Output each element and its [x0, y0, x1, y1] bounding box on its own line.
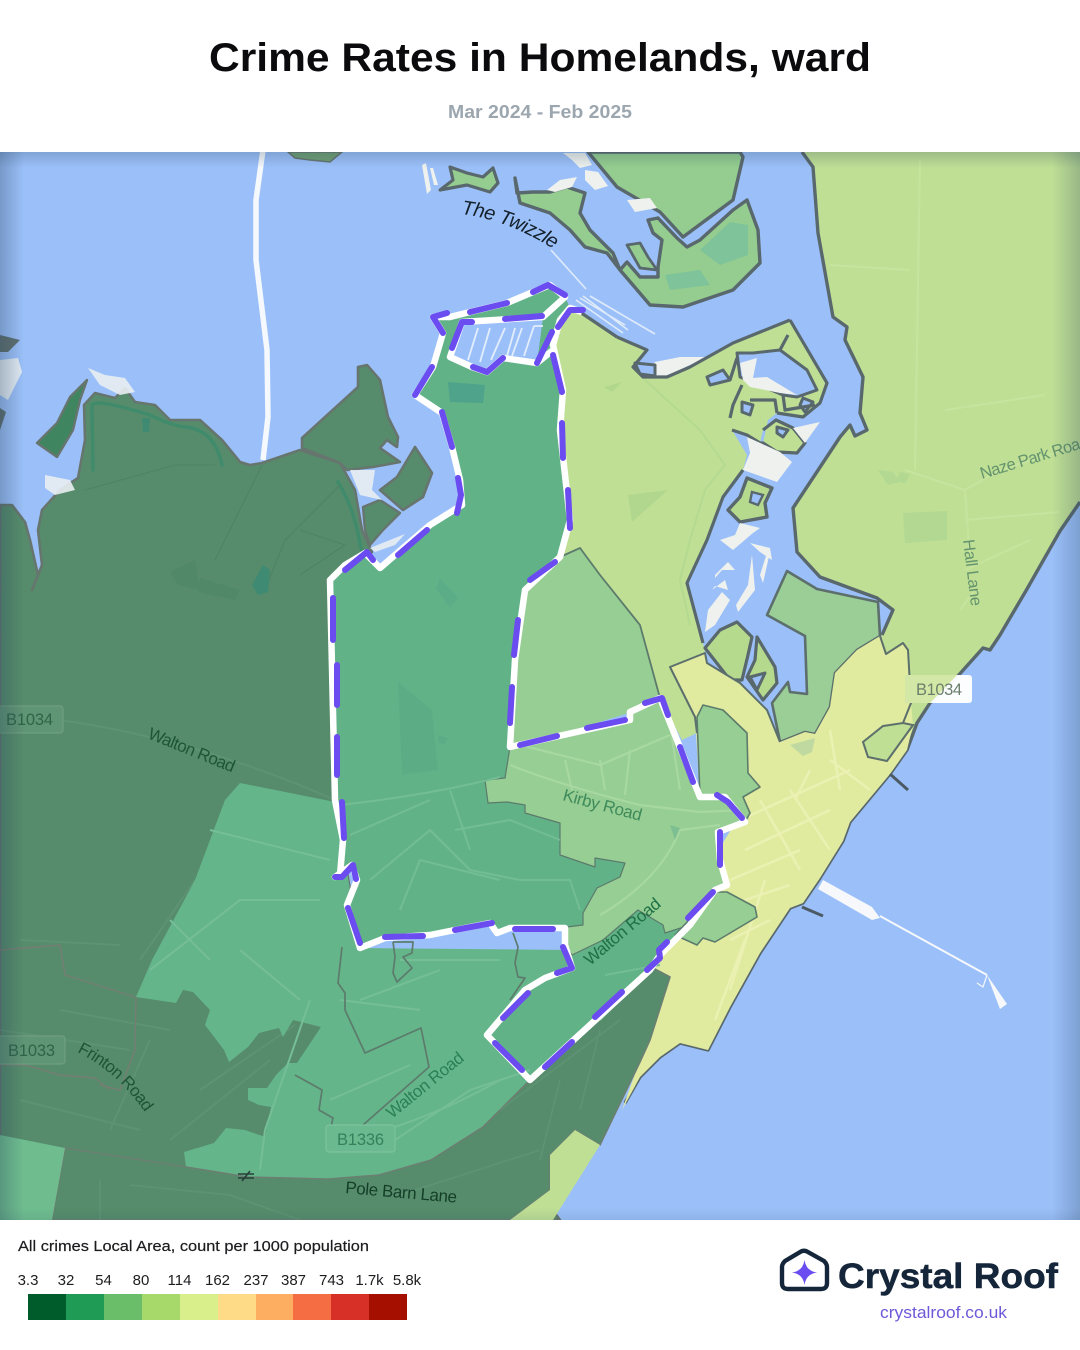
legend tick labels: 743 [319, 1272, 344, 1289]
sand banks [743, 422, 820, 482]
label: Walton Road south: Walton Road [383, 1048, 468, 1122]
legend tick labels: 3.3 [18, 1272, 38, 1289]
north ward light area [510, 548, 660, 750]
harbour basin [750, 673, 765, 690]
bottom-left green cell [0, 1135, 65, 1220]
faint field patches on central land [604, 382, 668, 522]
faint stream on central land [645, 380, 725, 625]
label: Naze Park Road: Naze Park Roa [978, 435, 1080, 483]
western streams [85, 465, 345, 590]
label: Hall Lane: Hall Lane [959, 538, 985, 607]
salt marsh on island [665, 222, 748, 290]
legend tick labels: 387 [281, 1272, 306, 1289]
Homelands ward fill [330, 285, 745, 1080]
label: Frinton Road: Frinton Road [78, 1042, 154, 1112]
road shield B1034 east: B1034 [916, 681, 962, 699]
islet C [363, 500, 400, 545]
marsh sand [643, 357, 797, 395]
legend tick labels: 1.7k [355, 1272, 384, 1289]
harbour land south [705, 622, 752, 680]
town streets [715, 730, 870, 1020]
yellow town ward [622, 636, 913, 1110]
small dark rocks on far left [0, 335, 20, 430]
map [0, 152, 1080, 1220]
northern sand flats [422, 153, 657, 212]
south band streets [100, 1020, 620, 1220]
road shield B1336 [326, 1125, 395, 1152]
district border lines [295, 933, 525, 1133]
water background [0, 152, 1080, 1220]
marsh lake [737, 350, 817, 397]
ponds in ward [436, 578, 680, 840]
website url: crystalroof.co.uk [880, 1304, 1008, 1322]
small north-west island [440, 167, 498, 192]
legend tick labels: 114 [168, 1272, 191, 1289]
legend title: All crimes Local Area, count per 1000 population [18, 1238, 369, 1255]
title: Crime Rates in Homelands, ward [209, 36, 871, 80]
road shield B1033 [0, 1036, 65, 1064]
road shield B1034 west: B1034 [6, 711, 53, 729]
ward streets [340, 777, 660, 1020]
logo wordmark: Crystal Roof [838, 1257, 1058, 1296]
islet in bay [627, 243, 657, 270]
east coast outline [625, 152, 1080, 1103]
label: Walton Road east: Walton Road [580, 894, 665, 969]
ward boundary: white outline [330, 285, 745, 1080]
western island [37, 380, 87, 457]
south dark band [52, 968, 670, 1220]
label: Pole Barn Lane: Pole Barn Lane [345, 1178, 458, 1207]
east ward outlier 2 [675, 892, 757, 945]
pier [818, 880, 1007, 1009]
marina basin [450, 317, 543, 372]
legend tick labels [18, 1272, 422, 1289]
logo icon: house with star [782, 1251, 827, 1289]
road shield B1034 west [0, 706, 63, 733]
east land: Naze [793, 152, 1080, 760]
grey district borders in west [0, 945, 136, 1090]
road shield B1336: B1336 [337, 1131, 384, 1149]
legend tick labels: 54 [95, 1272, 112, 1289]
label: The Twizzle: The Twizzle [464, 200, 558, 247]
channel island pool [750, 492, 763, 505]
sand streaks in channel [705, 523, 772, 632]
Kirby streets [510, 725, 745, 915]
top islet [288, 152, 342, 162]
bottom light strip [510, 1130, 600, 1220]
harbour land south 2 [747, 637, 777, 700]
railway station symbol [238, 1171, 254, 1181]
ward boundary: purple dashes [333, 285, 742, 1070]
jetties [802, 774, 908, 916]
north area border [560, 548, 660, 698]
label: Kirby Road: Kirby Road [561, 786, 644, 825]
road shield B1033: B1033 [8, 1042, 55, 1060]
marina pontoons [468, 326, 543, 362]
north-west road causeway [256, 150, 268, 460]
coast of the channel west bank [687, 470, 743, 643]
dark west land [0, 388, 560, 1220]
road shield B1034 east [905, 675, 972, 703]
marsh creek outlines [577, 310, 827, 453]
western ponds [142, 418, 270, 595]
south-west streets [150, 830, 530, 1170]
island A [302, 365, 400, 470]
yellow ward border [670, 636, 911, 742]
coastal green patch [863, 723, 913, 761]
main northern island [515, 178, 760, 307]
field in ward [398, 682, 438, 775]
label: Walton Road west: Walton Road [146, 724, 238, 776]
channel island [728, 478, 772, 522]
pale park patch [790, 738, 815, 756]
legend tick labels: 5.8k [393, 1272, 422, 1289]
western sand flats [0, 358, 405, 552]
breakwater lines [551, 250, 655, 334]
marsh ponds [635, 363, 813, 437]
roads on the Naze [830, 160, 1080, 610]
Hamford water central zone [767, 571, 880, 742]
upper island [588, 152, 743, 237]
Kirby Road lighter area [485, 698, 745, 955]
dark west patches [170, 560, 240, 600]
date range subtitle: Mar 2024 - Feb 2025 [448, 102, 632, 122]
central land [556, 313, 826, 740]
island B [380, 447, 432, 510]
legend tick labels: 32 [58, 1272, 74, 1289]
legend colour scale [28, 1294, 407, 1320]
legend tick labels: 162 [205, 1272, 230, 1289]
north-west sea wall [90, 402, 364, 552]
south-west green area [136, 783, 665, 1179]
legend [18, 1238, 422, 1320]
western road [0, 720, 335, 1200]
legend tick labels: 237 [243, 1272, 269, 1289]
east ward outlier 1 [697, 705, 760, 822]
ward pond and fields [448, 382, 485, 403]
map vignette edges [0, 152, 1080, 1220]
legend tick labels: 80 [133, 1272, 149, 1289]
field patches on the Naze [878, 470, 947, 543]
